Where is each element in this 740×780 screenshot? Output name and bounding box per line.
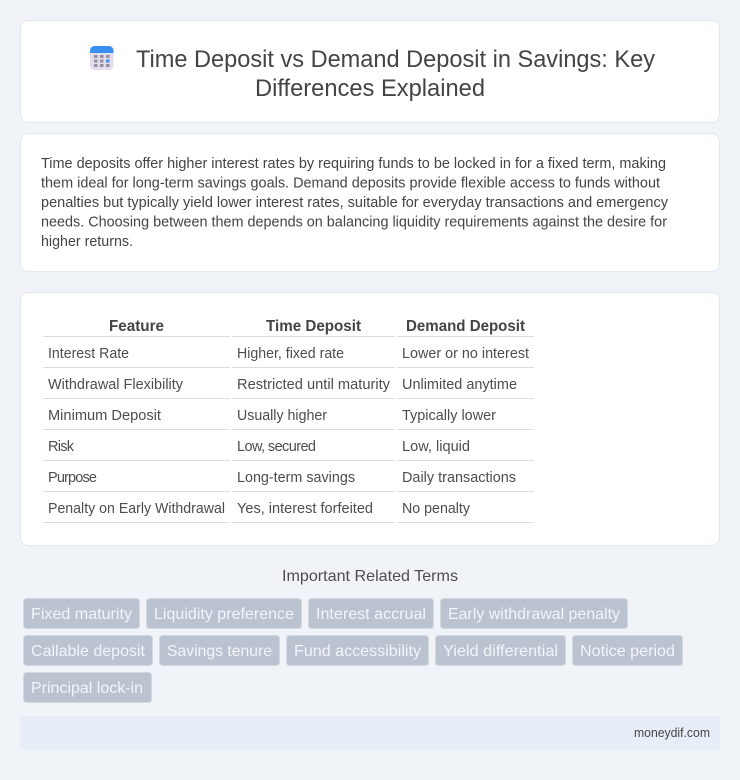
row: withdrawal flexibility: Withdrawal Flexibility bbox=[48, 377, 184, 393]
tag: interest accrual bbox=[308, 598, 434, 628]
tag: savings tenure bbox=[160, 636, 280, 666]
row: minimum deposit: Minimum Deposit bbox=[48, 408, 161, 424]
panel: introduction bbox=[20, 134, 720, 272]
tags bbox=[24, 598, 682, 702]
intro text: them ideal for long-term savings goals. Demand deposits provide flexible access to funds without bbox=[41, 176, 660, 192]
tag: yield differential: Yield differential bbox=[443, 643, 558, 660]
row: penalty on early withdrawal: No penalty bbox=[402, 501, 471, 517]
row: interest rate bbox=[48, 346, 529, 362]
row: purpose: Purpose bbox=[48, 470, 97, 486]
row: withdrawal flexibility: Unlimited anytime bbox=[402, 377, 517, 393]
row: penalty on early withdrawal: Yes, interest forfeited bbox=[237, 501, 373, 517]
row: penalty on early withdrawal bbox=[48, 501, 471, 517]
intro text: needs. Choosing between them depends on balancing liquidity requirements against the desire for bbox=[41, 214, 667, 230]
row: purpose: Daily transactions bbox=[402, 470, 516, 486]
row: purpose: Long-term savings bbox=[237, 470, 355, 486]
tag: fund accessibility bbox=[286, 636, 428, 666]
tag: fixed maturity: Fixed maturity bbox=[31, 606, 132, 623]
row: risk bbox=[48, 439, 470, 455]
tag: liquidity preference bbox=[146, 598, 302, 628]
tag: notice period: Notice period bbox=[580, 643, 675, 660]
tag: fixed maturity bbox=[24, 598, 140, 628]
tag: callable deposit: Callable deposit bbox=[31, 643, 146, 660]
intro text: higher returns. bbox=[41, 234, 133, 250]
tag: early withdrawal penalty bbox=[440, 598, 628, 628]
row: risk: Low, liquid bbox=[402, 439, 470, 455]
row: minimum deposit: Usually higher bbox=[237, 408, 327, 424]
heading: important related terms: Important Related Terms bbox=[282, 568, 458, 585]
title bbox=[136, 46, 655, 102]
table header: Time Deposit bbox=[266, 318, 362, 335]
row: penalty on early withdrawal: Penalty on Early Withdrawal bbox=[48, 501, 225, 517]
tag: callable deposit bbox=[24, 636, 152, 666]
row: risk: Low, secured bbox=[237, 439, 316, 455]
table header: Feature bbox=[109, 318, 164, 335]
row: purpose bbox=[48, 470, 516, 486]
table header: Demand Deposit bbox=[406, 318, 526, 335]
tag: liquidity preference: Liquidity preference bbox=[154, 606, 294, 623]
tag: early withdrawal penalty: Early withdrawal penalty bbox=[448, 606, 620, 623]
row: interest rate: Interest Rate bbox=[48, 346, 129, 362]
tag: yield differential bbox=[436, 636, 566, 666]
tag: notice period bbox=[572, 636, 682, 666]
row: interest rate: Lower or no interest bbox=[402, 346, 529, 362]
icon: calendar bbox=[90, 46, 114, 70]
row: withdrawal flexibility bbox=[48, 377, 517, 393]
panel: comparison table bbox=[20, 292, 720, 546]
table header bbox=[109, 318, 526, 335]
intro text: Time deposits offer higher interest rates by requiring funds to be locked in for a fixed term, making bbox=[41, 156, 666, 172]
tag: fund accessibility: Fund accessibility bbox=[294, 643, 421, 660]
row: withdrawal flexibility: Restricted until maturity bbox=[237, 377, 391, 393]
tag: interest accrual: Interest accrual bbox=[316, 606, 426, 623]
panel: header bbox=[20, 20, 720, 122]
footer bbox=[20, 716, 720, 750]
tag: principal lock-in bbox=[24, 672, 152, 702]
title: Differences Explained bbox=[255, 75, 485, 102]
row: minimum deposit: Typically lower bbox=[402, 408, 496, 424]
intro text bbox=[41, 156, 669, 250]
intro text: penalties but typically yield lower interest rates, suitable for everyday transactions and emergency bbox=[41, 195, 669, 211]
row: risk: Risk bbox=[48, 439, 75, 455]
tag: principal lock-in: Principal lock-in bbox=[31, 680, 143, 697]
title: Time Deposit vs Demand Deposit in Savings: Key bbox=[136, 46, 655, 73]
row: minimum deposit bbox=[48, 408, 496, 424]
row: interest rate: Higher, fixed rate bbox=[237, 346, 344, 362]
tag: savings tenure: Savings tenure bbox=[167, 643, 272, 660]
footer: moneydif.com bbox=[634, 726, 710, 740]
